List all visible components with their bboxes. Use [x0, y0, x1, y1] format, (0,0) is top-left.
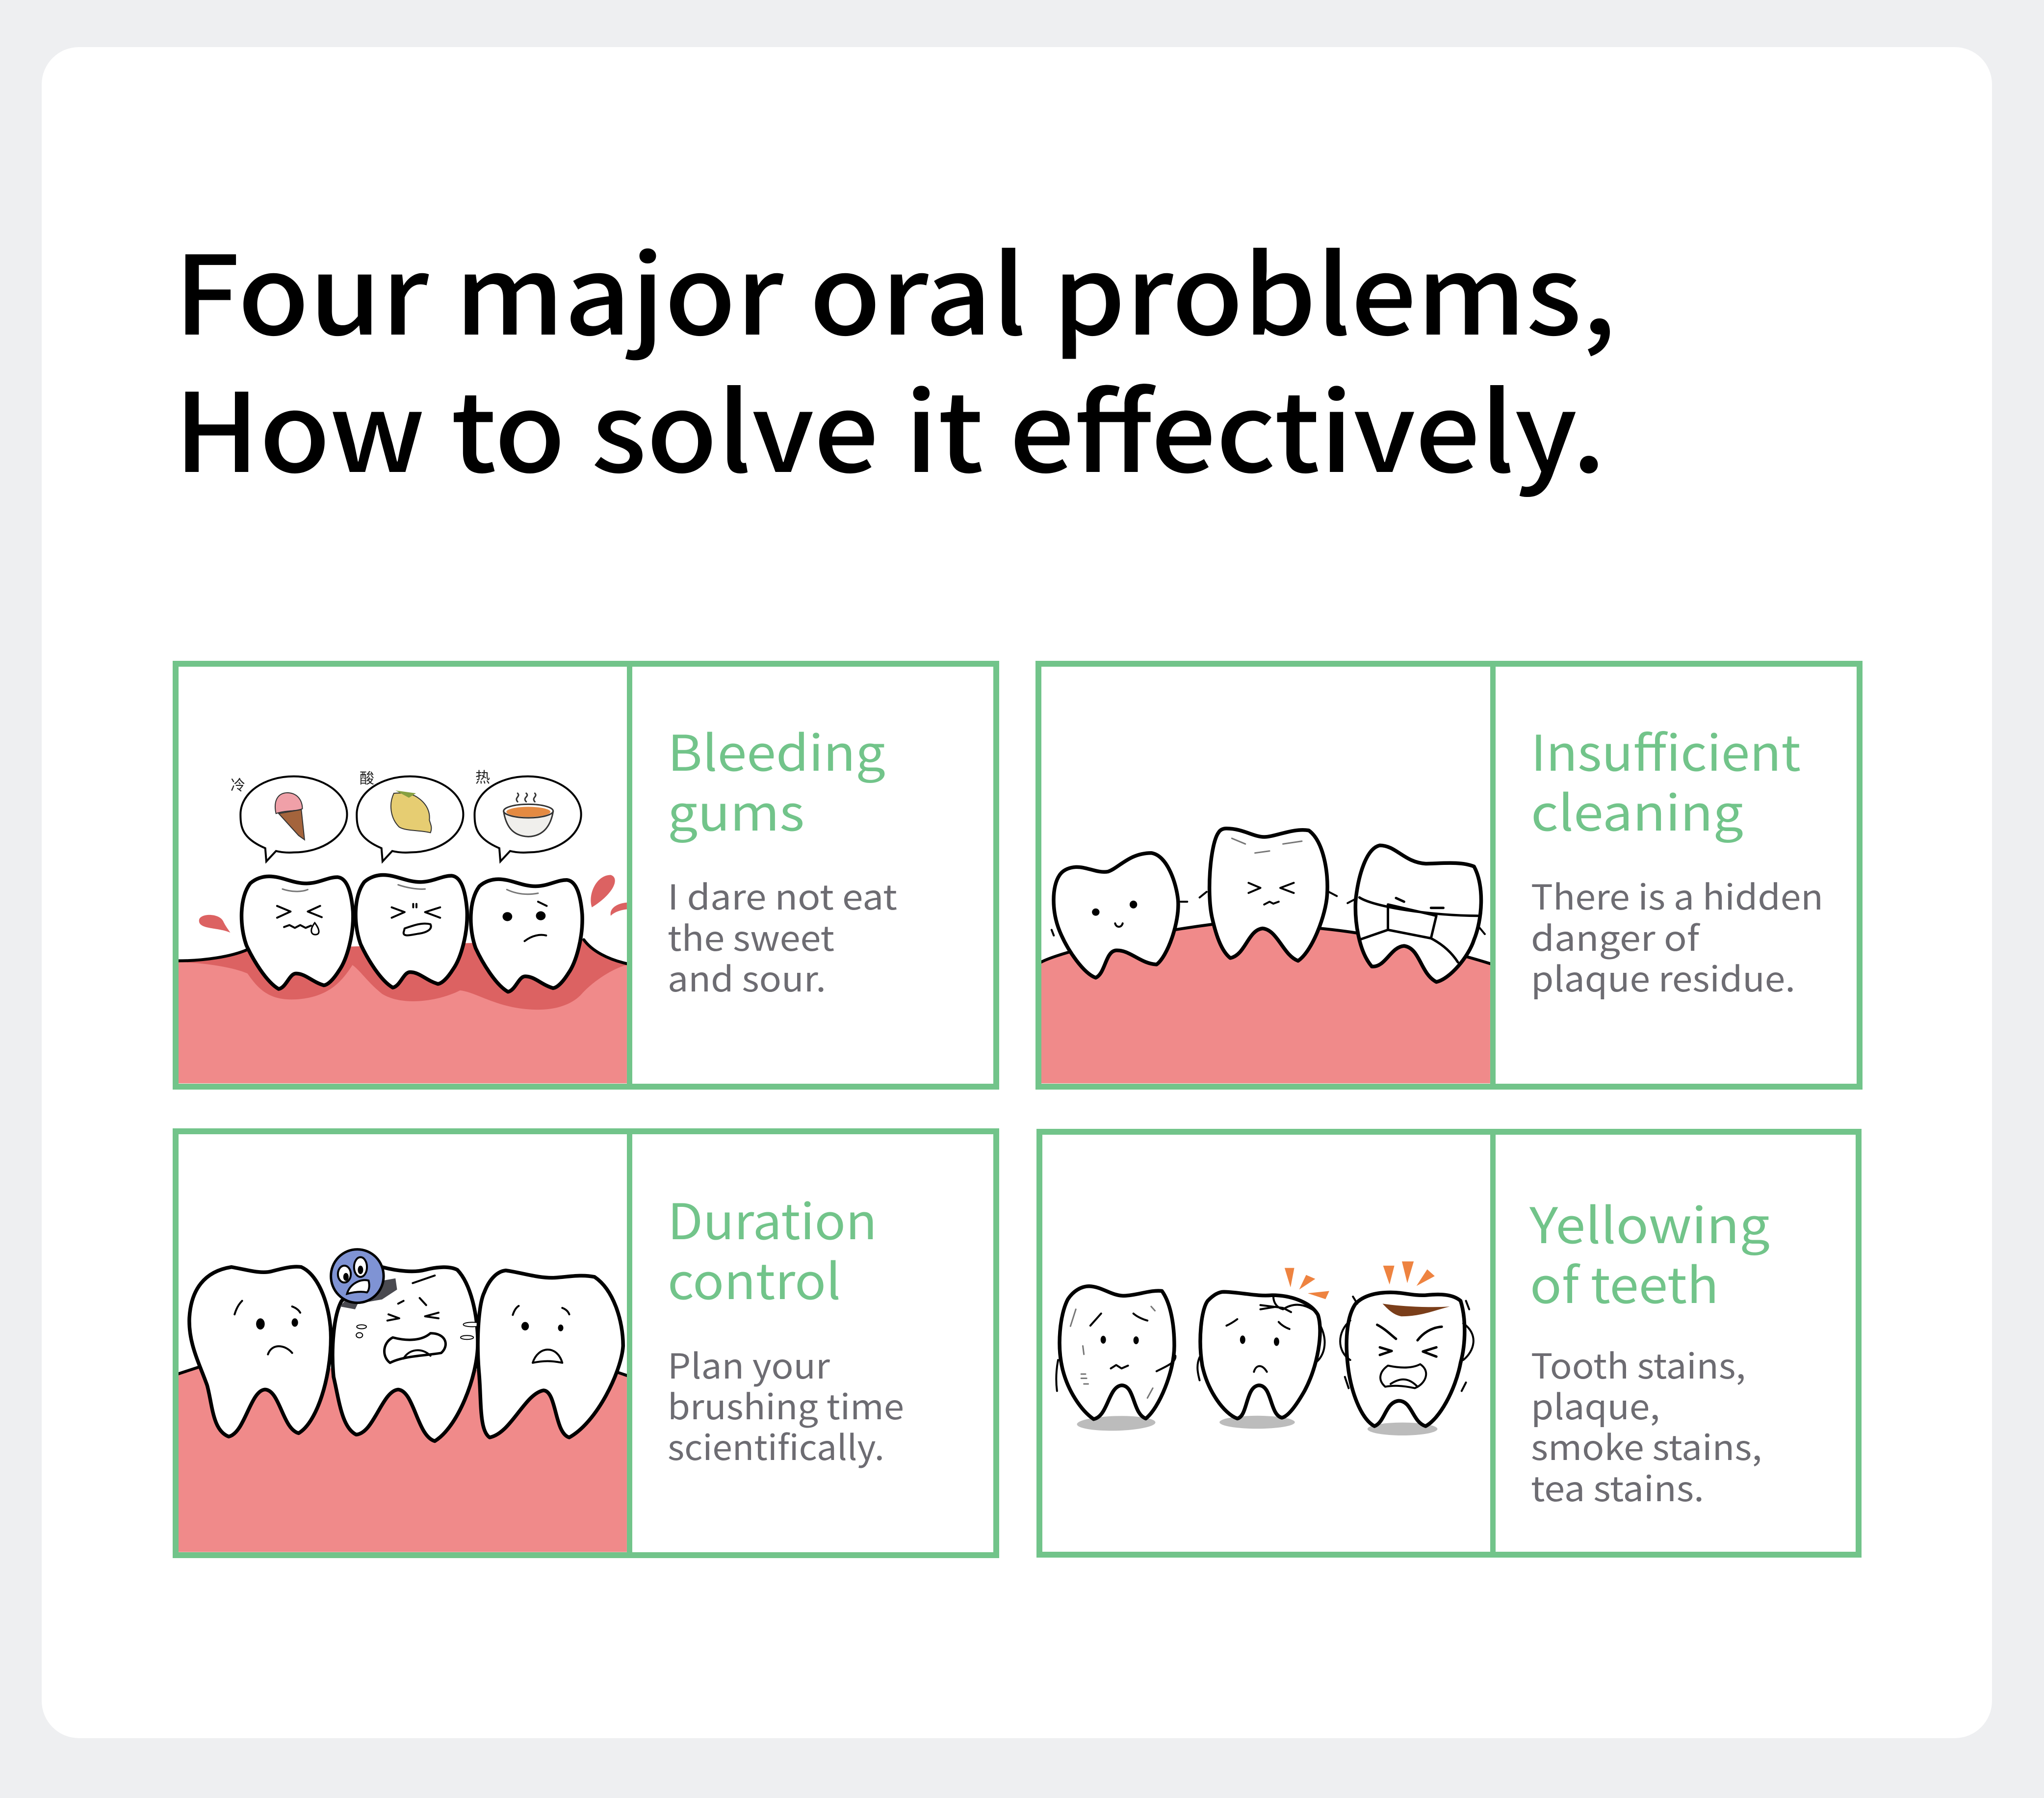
heading [668, 1182, 877, 1313]
panel border [176, 1130, 996, 1557]
germ [331, 1250, 384, 1303]
description: smoke stains, [1531, 1421, 1762, 1470]
heading: control [668, 1242, 841, 1313]
icon: ice cream [275, 793, 305, 840]
illustration: three teeth on gum [1041, 829, 1490, 1083]
description [1531, 870, 1823, 1002]
description: scientifically. [668, 1421, 884, 1470]
description: the sweet [668, 912, 834, 961]
panel: yellowing of teeth [1039, 1130, 1859, 1557]
panel: bleeding gums [176, 662, 996, 1088]
description: plaque residue. [1531, 952, 1795, 1002]
shadows [1076, 1415, 1437, 1435]
tooth: decayed [1340, 1292, 1474, 1426]
title: Four major oral problems, [174, 208, 1616, 366]
panel border [1039, 1130, 1859, 1557]
title [174, 208, 1616, 503]
panel border [176, 662, 996, 1088]
tooth: frightened [478, 1271, 623, 1437]
tooth: pained [333, 1267, 482, 1441]
icon: soup bowl [504, 793, 553, 836]
description [1531, 1339, 1762, 1511]
tooth: grimacing [356, 875, 467, 988]
illustration: sensitive teeth with bleeding gums [178, 777, 627, 1083]
tooth: smiling [1052, 853, 1187, 978]
description: Tooth stains, [1531, 1339, 1746, 1389]
tooth: stained [1056, 1286, 1175, 1419]
heading: gums [668, 774, 804, 845]
title: How to solve it effectively. [174, 345, 1606, 503]
description: plaque, [1531, 1380, 1660, 1430]
panel: duration control [176, 1130, 996, 1557]
speech bubbles [240, 777, 581, 861]
tooth: worried [471, 879, 582, 992]
label characters: 酸 [360, 771, 374, 787]
label characters: 热 [475, 770, 490, 786]
icon: lemon [391, 790, 431, 833]
illustration: teeth with germ [178, 1250, 627, 1552]
label characters: 冷 [231, 778, 245, 794]
description: tea stains. [1531, 1462, 1704, 1511]
heading: Yellowing [1529, 1186, 1770, 1257]
icon: blood drops [199, 875, 627, 933]
tooth: crying [241, 876, 353, 989]
description [668, 870, 897, 1002]
label characters [231, 770, 490, 794]
panel: insufficient cleaning [1038, 662, 1860, 1088]
heading [1529, 1186, 1770, 1317]
heading: Duration [668, 1182, 877, 1253]
description: There is a hidden [1531, 870, 1823, 920]
heading: Insufficient [1531, 714, 1801, 785]
description: Plan your [668, 1339, 830, 1389]
description: and sour. [668, 952, 826, 1002]
heading: cleaning [1531, 774, 1743, 845]
tooth: sad [189, 1267, 331, 1436]
heading: Bleeding [668, 714, 885, 785]
tooth: chipped [1197, 1292, 1325, 1419]
heading [668, 714, 885, 845]
description: danger of [1531, 912, 1700, 961]
tooth: bandaged [1347, 845, 1485, 982]
description [668, 1339, 904, 1470]
panel border [1038, 662, 1860, 1088]
description: I dare not eat [668, 870, 897, 920]
heading [1531, 714, 1801, 845]
illustration: stained teeth [1056, 1261, 1474, 1435]
icon: orange alert marks [1285, 1261, 1435, 1299]
tooth: squinting [1200, 829, 1337, 961]
heading: of teeth [1530, 1246, 1719, 1317]
description: brushing time [668, 1380, 904, 1430]
